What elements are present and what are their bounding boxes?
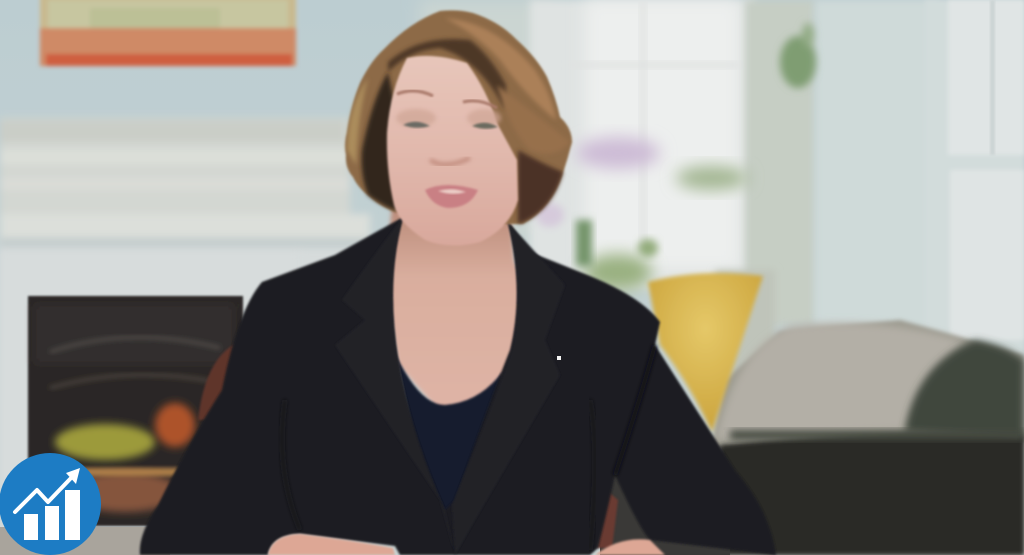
- eyes: [403, 122, 430, 128]
- hair dark underside left: [362, 72, 400, 210]
- yellow pillow: [648, 273, 763, 432]
- hair dark top: [388, 39, 506, 110]
- chair back: [198, 344, 240, 420]
- trend arrow: [15, 477, 72, 512]
- brows: [397, 91, 433, 96]
- face: [387, 56, 518, 246]
- mouth: [425, 185, 478, 208]
- fireplace: [28, 296, 243, 526]
- fireplace mantel: [0, 118, 370, 490]
- hanging plant: [780, 23, 816, 88]
- hair tan band left: [347, 78, 368, 165]
- nose: [430, 158, 470, 165]
- floor: [0, 527, 170, 555]
- blazer folds: [590, 400, 595, 550]
- hair dark underside right: [518, 150, 563, 224]
- blazer: [140, 217, 776, 555]
- lapel right: [452, 222, 565, 555]
- windows: [530, 0, 1024, 355]
- hands: [268, 534, 395, 555]
- orchid plant: [536, 137, 748, 290]
- lapel pin: [557, 356, 561, 360]
- logo: rising chart badge: [0, 453, 101, 555]
- woman: [140, 10, 776, 555]
- hair highlights: [445, 18, 556, 120]
- dark top: [396, 355, 502, 530]
- sofa and blanket: [600, 270, 1024, 555]
- eye shadows: [396, 109, 436, 127]
- neck and chest: [385, 205, 530, 412]
- painting on wall: [40, 0, 296, 66]
- bars: [24, 490, 80, 540]
- lapel left: [335, 217, 455, 555]
- hair mass: [345, 10, 572, 224]
